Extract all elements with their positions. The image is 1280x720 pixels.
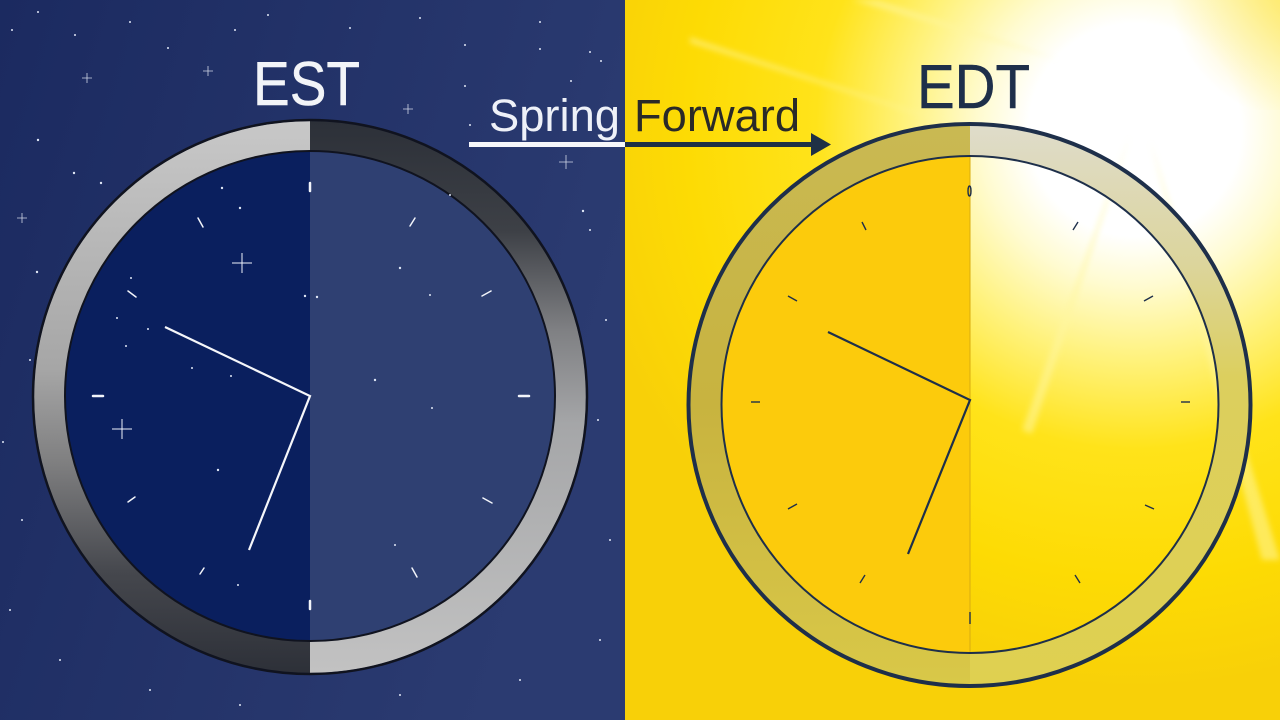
clock face: EDT (722, 156, 970, 652)
clock face: EST (65, 151, 555, 641)
sparkle stars (17, 66, 573, 223)
face stars (116, 187, 451, 586)
arrow: spring forward (469, 133, 831, 156)
panel: day side (EDT) (625, 0, 1280, 720)
clock: EDT (688, 124, 1250, 686)
clock hands: EDT (828, 332, 970, 554)
arrow label: Spring Forward: Spring (489, 90, 620, 141)
clock ring: EDT (688, 124, 1250, 686)
heading: EST: EST (253, 50, 360, 119)
tick marks: EST (93, 183, 529, 609)
panel: night side (EST) (0, 0, 625, 720)
sun rays (690, 0, 1280, 560)
background stars (2, 11, 611, 706)
face sparkle stars (112, 253, 252, 439)
sun glow (625, 0, 1280, 720)
arrow label: Spring Forward (489, 90, 800, 141)
heading: EDT: EDT (917, 53, 1030, 122)
tick marks: EDT (751, 186, 1190, 624)
clock: EST (33, 120, 587, 674)
clock hands: EST (165, 327, 310, 550)
clock ring: EST (33, 120, 587, 674)
arrow label: Spring Forward: Forward (634, 90, 800, 141)
